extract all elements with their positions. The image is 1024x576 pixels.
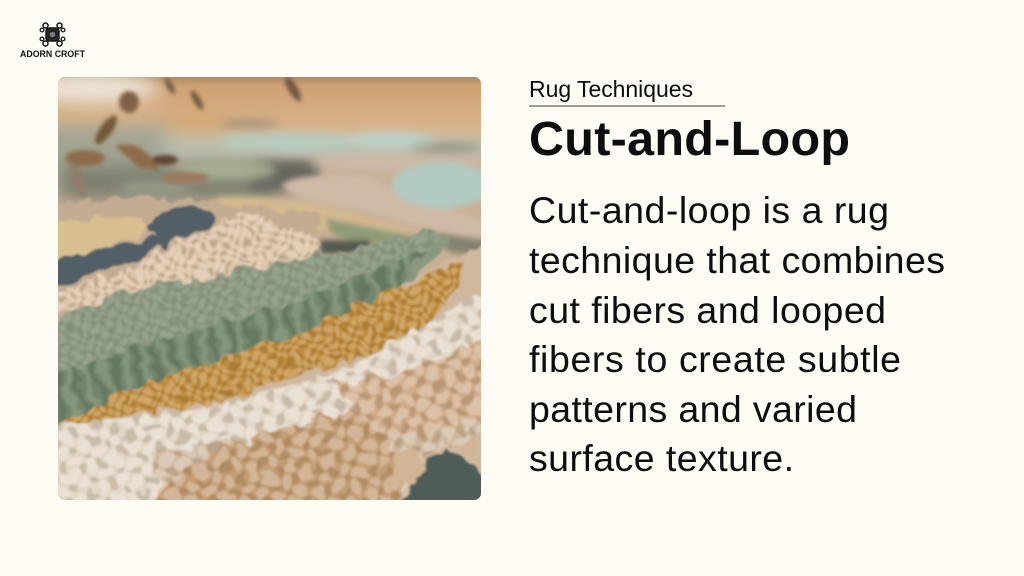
description text: patterns and varied [529, 388, 857, 430]
logo: Adorn Croft [20, 22, 85, 59]
wood floor background [58, 77, 481, 140]
description text: fibers to create subtle [529, 338, 901, 380]
lower beige looped field [58, 244, 481, 500]
description text: technique that combines [529, 239, 945, 281]
dark backing, bottom right [400, 448, 481, 500]
description text [529, 189, 945, 479]
description text: surface texture. [529, 437, 794, 479]
text panel [529, 76, 945, 479]
eyebrow: Rug Techniques: Rug Techniques [529, 76, 693, 102]
rug base colour [58, 77, 481, 500]
logo wordmark: ADORN CROFT [20, 49, 85, 59]
foreground rug rows, organically roughened [58, 194, 481, 500]
heading: Cut-and-Loop: Cut-and-Loop [529, 112, 850, 166]
photo: close-up of cut-and-loop rug [58, 77, 481, 500]
icon: knot emblem [40, 23, 65, 46]
orange looped band [70, 262, 465, 425]
green cut pile band [58, 228, 450, 374]
left rows: tan, blue-grey, peach [58, 194, 321, 286]
divider under eyebrow [529, 106, 725, 107]
blurred background rug [20, 72, 490, 200]
dried leaves [65, 75, 304, 199]
description text: cut fibers and looped [529, 289, 886, 331]
loop texture on lower field [58, 295, 481, 500]
description text: Cut-and-loop is a rug [529, 189, 889, 231]
